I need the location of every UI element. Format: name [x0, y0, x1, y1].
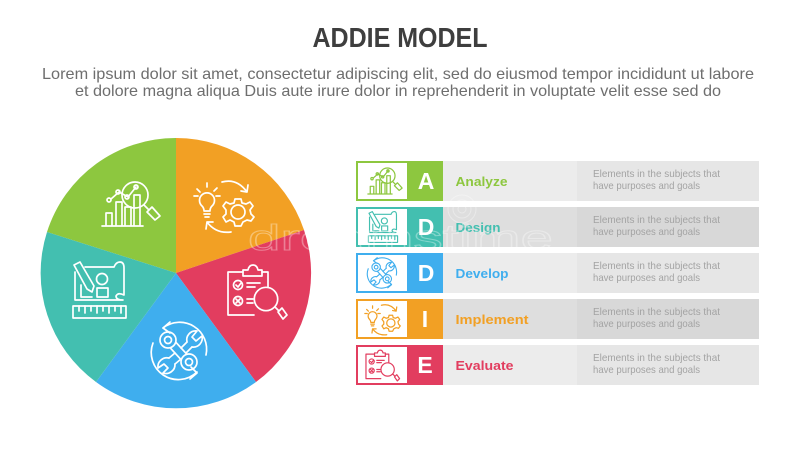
icon: analyze	[368, 168, 402, 194]
wedge: evaluate	[176, 230, 311, 382]
description: have purposes and goals	[593, 226, 700, 238]
description: have purposes and goals	[593, 180, 700, 192]
description: Elements in the subjects that	[593, 214, 720, 226]
icon: develop wrenches	[151, 322, 207, 380]
description	[593, 214, 720, 238]
letter E: E	[417, 352, 433, 378]
icon: design blueprint	[73, 262, 126, 318]
icon: implement	[365, 305, 400, 335]
description	[593, 260, 720, 284]
row: Analyze	[357, 161, 759, 201]
label Design: Design	[456, 220, 501, 235]
label Implement: Implement	[456, 312, 529, 327]
wedge: design	[41, 232, 176, 382]
row: Implement	[357, 299, 759, 339]
description: Elements in the subjects that	[593, 168, 720, 180]
pie chart	[41, 138, 311, 408]
watermark: dreamstime	[248, 217, 553, 258]
label Analyze: Analyze	[456, 174, 508, 189]
letter I: I	[422, 306, 428, 332]
description	[593, 168, 720, 192]
row: Design	[357, 207, 759, 247]
description	[593, 306, 720, 330]
icon: implement bulb and gear	[194, 181, 254, 232]
description: have purposes and goals	[593, 272, 700, 284]
description: have purposes and goals	[593, 318, 700, 330]
description: Elements in the subjects that	[593, 352, 720, 364]
label Develop: Develop	[456, 266, 509, 281]
row: Evaluate	[357, 345, 759, 385]
description: Elements in the subjects that	[593, 260, 720, 272]
label Evaluate: Evaluate	[456, 358, 514, 373]
icon: design	[368, 212, 398, 242]
wedge: analyze	[47, 138, 176, 273]
wedge: develop	[96, 273, 256, 408]
watermark	[248, 195, 553, 258]
subtitle text: et dolore magna aliqua Duis aute irure dolor in reprehenderit in voluptate velit esse sed do	[75, 83, 721, 100]
letter A: A	[418, 168, 434, 194]
icon: evaluate clipboard	[228, 265, 287, 319]
subtitle text	[42, 66, 754, 100]
description	[593, 352, 720, 376]
subtitle text: Lorem ipsum dolor sit amet, consectetur adipiscing elit, sed do eiusmod tempor incididunt ut labore	[42, 66, 754, 83]
wedge: implement	[176, 138, 304, 273]
description: have purposes and goals	[593, 364, 700, 376]
icon: develop	[367, 258, 397, 288]
icon: evaluate	[366, 350, 400, 381]
title: ADDIE MODEL	[312, 22, 488, 53]
letter D: D	[418, 214, 434, 240]
description: Elements in the subjects that	[593, 306, 720, 318]
icon: analyze chart	[102, 182, 160, 226]
letter D: D	[418, 260, 434, 286]
row: Develop	[357, 253, 759, 293]
